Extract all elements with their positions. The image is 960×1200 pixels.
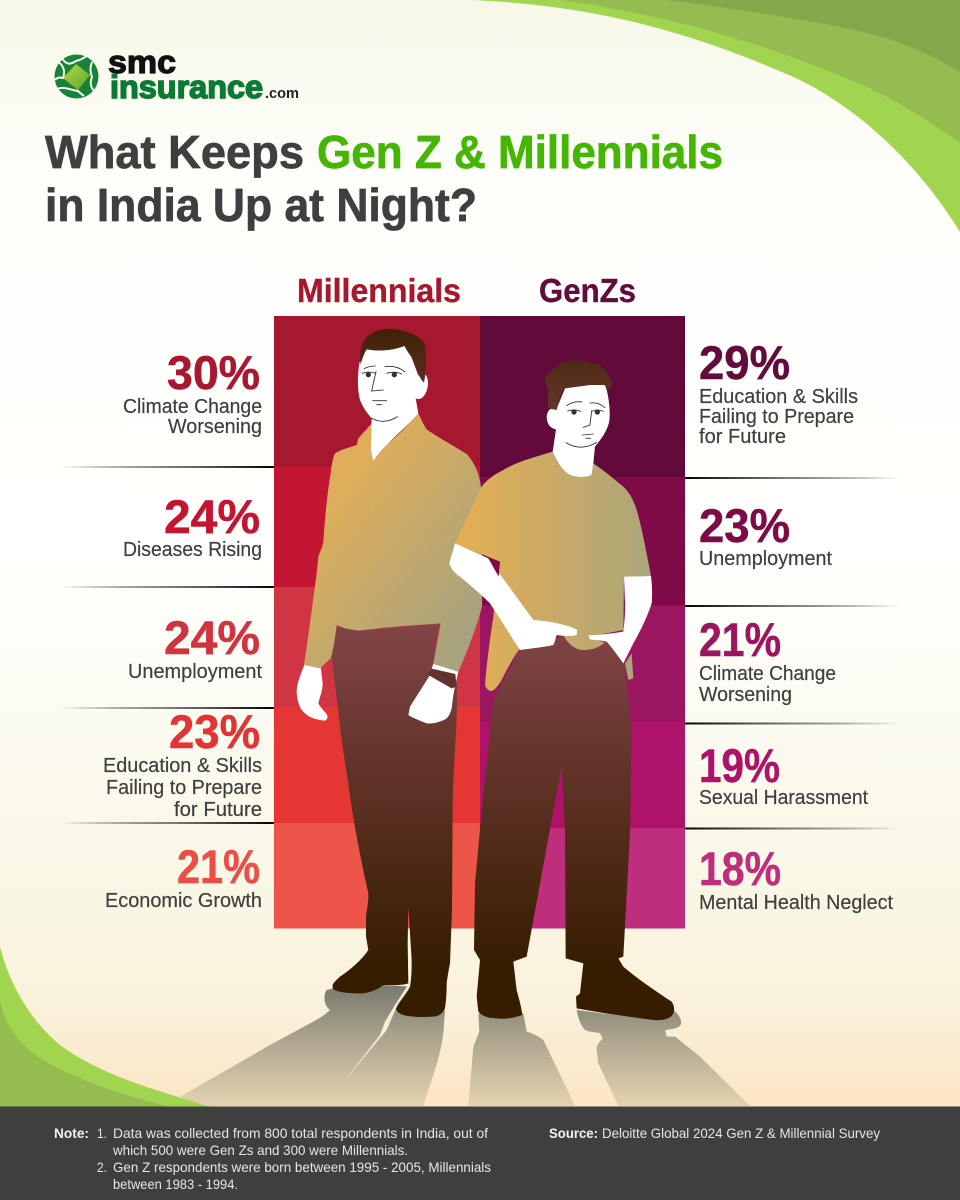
hair: [360, 329, 426, 383]
stat: Millennials 24% unemployment: [128, 611, 262, 683]
stat: GenZs 21% climate change: Worsening: [699, 684, 792, 706]
stat: GenZs 23% unemployment: Unemployment: [699, 548, 832, 570]
stat: Millennials 24% diseases: Diseases Rising: [123, 539, 262, 561]
face lines: [362, 366, 405, 421]
stat: GenZs 18% mental health: 18%: [699, 842, 781, 895]
divider lines: [60, 466, 900, 830]
stat: Millennials 23% education: [103, 705, 262, 821]
stat: GenZs 21% climate change: Climate Change: [699, 663, 836, 685]
neck and face: [547, 385, 610, 477]
stat: Millennials 24% diseases: 24%: [164, 490, 260, 543]
right arm: [588, 576, 652, 663]
stat: Millennials 30% climate change: Climate Change: [123, 396, 262, 418]
footer note: Gen Z respondents were born between 1995 - 2005, Millennials: [113, 1159, 491, 1175]
trousers: [332, 623, 457, 1017]
bar: Millennials column: [274, 316, 480, 928]
stat: Millennials 21% economic growth: 21%: [177, 840, 260, 893]
stat: Millennials 23% education: Failing to Prepare: [106, 777, 262, 799]
stat: GenZs 29% education: Failing to Prepare: [699, 406, 854, 428]
stat: Millennials 21% economic growth: Economic Growth: [105, 890, 262, 912]
stat: GenZs 18% mental health: Mental Health Neglect: [699, 892, 893, 914]
stat: Millennials 30% climate change: [123, 346, 262, 438]
illustration: two worried men: [180, 329, 750, 1106]
stat: Millennials 30% climate change: Worsening: [168, 416, 262, 438]
stat: GenZs 21% climate change: 21%: [699, 613, 781, 666]
face lines: [566, 402, 605, 447]
shadows on ground: [180, 983, 750, 1106]
heading: Millennials: Millennials: [297, 272, 461, 309]
title: in India Up at Night?: [45, 179, 477, 231]
stat: Millennials 23% education: for Future: [174, 799, 262, 821]
bar: GenZs column: [480, 316, 685, 928]
footer note: Data was collected from 800 total respondents in India, out of: [113, 1125, 488, 1141]
stat: GenZs 21% climate change: [699, 613, 836, 706]
stat: Millennials 21% economic growth: [105, 840, 262, 912]
trousers: [474, 635, 674, 1020]
footer source: Deloitte Global 2024 Gen Z & Millennial Survey: [602, 1125, 880, 1141]
logo wordmark smc: smc: [108, 44, 176, 80]
logo: smc insurance: [54, 44, 299, 105]
footer source: Source:: [549, 1125, 598, 1141]
hair: [545, 360, 613, 410]
footer note: Note:: [54, 1125, 89, 1141]
shirt: [455, 452, 651, 691]
footer note: 1.: [97, 1125, 107, 1141]
footer note: 2.: [97, 1159, 107, 1175]
stat: GenZs 23% unemployment: 23%: [699, 499, 790, 552]
footer note: which 500 were Gen Zs and 300 were Millennials.: [112, 1142, 408, 1158]
left arm: [449, 543, 577, 650]
stat: GenZs 18% mental health: [699, 842, 893, 914]
footer note: [54, 1125, 491, 1192]
top right green waves: [470, 0, 960, 232]
title: [45, 126, 723, 231]
stat: Millennials 24% unemployment: Unemployment: [128, 661, 262, 683]
figure: gen z man: [449, 360, 674, 1020]
footer bar: [0, 1106, 960, 1200]
stat: Millennials 24% diseases: [123, 490, 262, 561]
figure: millennial man: [297, 329, 482, 1017]
stat: Millennials 23% education: 23%: [169, 705, 260, 758]
neck and face: [358, 343, 428, 462]
stat: GenZs 29% education: Education & Skills: [699, 386, 858, 408]
heading: GenZs: GenZs: [539, 272, 636, 309]
hands: [297, 663, 327, 721]
stat: GenZs 19% sexual harassment: [699, 739, 868, 809]
logo wordmark .com: .com: [265, 85, 299, 102]
stat: GenZs 23% unemployment: [699, 499, 832, 570]
watch: [428, 668, 457, 688]
stat: Millennials 24% unemployment: 24%: [164, 611, 260, 664]
stat: Millennials 23% education: Education & Skills: [103, 755, 262, 777]
stat: GenZs 29% education: for Future: [699, 426, 786, 448]
bottom left green waves: [0, 947, 213, 1107]
logo wordmark insurance: insurance: [110, 69, 263, 105]
stat: GenZs 19% sexual harassment: 19%: [699, 739, 780, 792]
footer note: between 1983 - 1994.: [113, 1176, 238, 1192]
title: What Keeps: [45, 126, 304, 178]
title: Gen Z & Millennials: [317, 126, 723, 178]
stat: GenZs 29% education: 29%: [699, 336, 790, 389]
stat: GenZs 19% sexual harassment: Sexual Harassment: [699, 787, 868, 809]
stat: GenZs 29% education: [699, 336, 858, 448]
icon: green globe: [54, 54, 98, 98]
stat: Millennials 30% climate change: 30%: [167, 346, 260, 399]
shirt: [304, 413, 482, 672]
